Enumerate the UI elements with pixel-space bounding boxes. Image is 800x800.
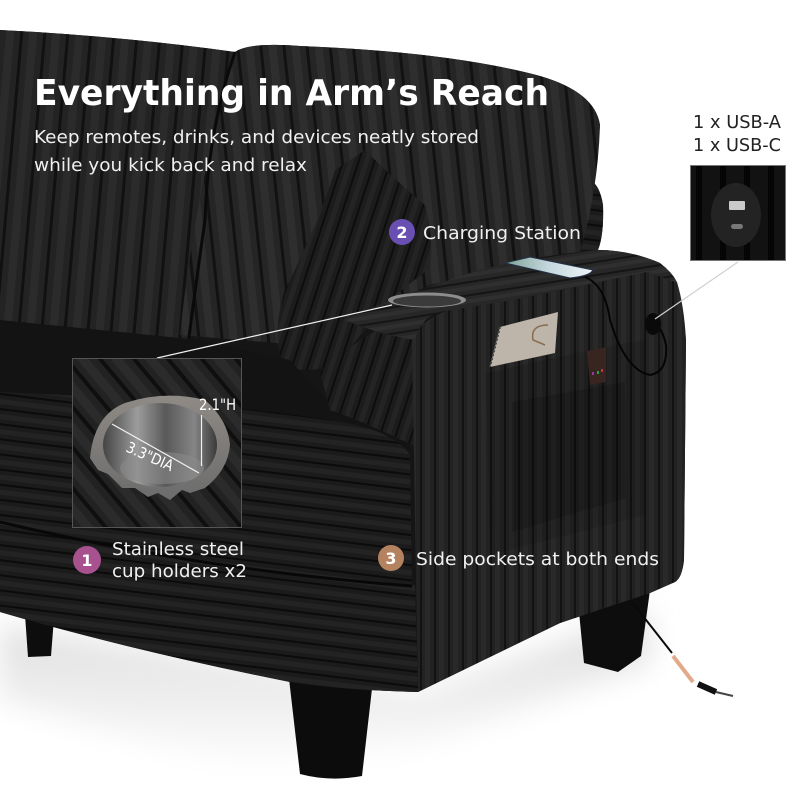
usb-a slot bbox=[729, 201, 745, 210]
sofa base bbox=[0, 522, 418, 692]
callout: cup holders: 1 bbox=[81, 551, 93, 570]
floor shadow bbox=[0, 610, 650, 770]
diameter arrow bbox=[112, 424, 199, 473]
sofa leg: right bbox=[579, 590, 650, 672]
rear arm bbox=[578, 180, 603, 250]
callout: charging station: Charging Station bbox=[423, 223, 581, 244]
height label: 2.1"H bbox=[199, 395, 236, 414]
cup floor bbox=[120, 452, 204, 484]
height arrow bbox=[200, 415, 202, 466]
usb plate bbox=[711, 183, 761, 247]
cup holder bbox=[388, 292, 466, 308]
usb labels: 1 x USB-C bbox=[693, 135, 781, 156]
callout: cup holders: cup holders x2 bbox=[112, 561, 247, 582]
usb labels bbox=[693, 112, 782, 156]
leader line: cup holder bbox=[157, 305, 392, 358]
cup interior bbox=[103, 403, 217, 487]
back cushion: right bbox=[180, 45, 600, 345]
sofa leg: middle bbox=[288, 670, 373, 779]
subtitle: Keep remotes, drinks, and devices neatly stored bbox=[34, 127, 479, 148]
pocket bbox=[486, 340, 645, 555]
seam bbox=[0, 522, 412, 586]
notebook bbox=[490, 312, 558, 367]
phone bbox=[505, 257, 593, 278]
charging cable bbox=[585, 277, 666, 375]
inset: usb ports bbox=[690, 166, 786, 260]
subtitle: while you kick back and relax bbox=[34, 155, 307, 176]
usb port bbox=[645, 313, 661, 335]
power cord bbox=[632, 602, 733, 696]
title: Everything in Arm’s Reach bbox=[34, 73, 549, 114]
remote control bbox=[587, 347, 606, 385]
seat front bbox=[0, 392, 412, 590]
usb labels: 1 x USB-A bbox=[693, 112, 782, 133]
arm inner front bbox=[320, 312, 425, 445]
usb-c slot bbox=[731, 224, 743, 229]
cup rim bbox=[90, 396, 230, 500]
cushion gap bbox=[188, 52, 235, 345]
callout: side pockets: Side pockets at both ends bbox=[416, 549, 659, 570]
inset: cup holder detail bbox=[72, 358, 242, 528]
arm top bbox=[345, 250, 677, 340]
callout: cup holders: Stainless steel bbox=[112, 539, 244, 560]
sofa silhouette bbox=[0, 30, 686, 692]
callout: side pockets bbox=[378, 545, 659, 571]
callout: side pockets: 3 bbox=[385, 549, 397, 568]
seat top bbox=[0, 320, 410, 470]
back cushion: left bbox=[0, 30, 235, 345]
leader line: usb port bbox=[655, 262, 738, 319]
callout: charging station bbox=[389, 219, 581, 245]
pocket: inner bbox=[512, 382, 626, 532]
diameter label: 3.3"DIA bbox=[123, 438, 177, 475]
callout: charging station: 2 bbox=[396, 223, 408, 242]
throw pillow bbox=[278, 150, 431, 370]
callout: cup holders bbox=[73, 539, 247, 582]
arm side panel bbox=[412, 272, 686, 692]
sofa leg: left bbox=[25, 615, 54, 657]
subtitle bbox=[34, 127, 479, 176]
pocket: outer bbox=[486, 340, 645, 555]
